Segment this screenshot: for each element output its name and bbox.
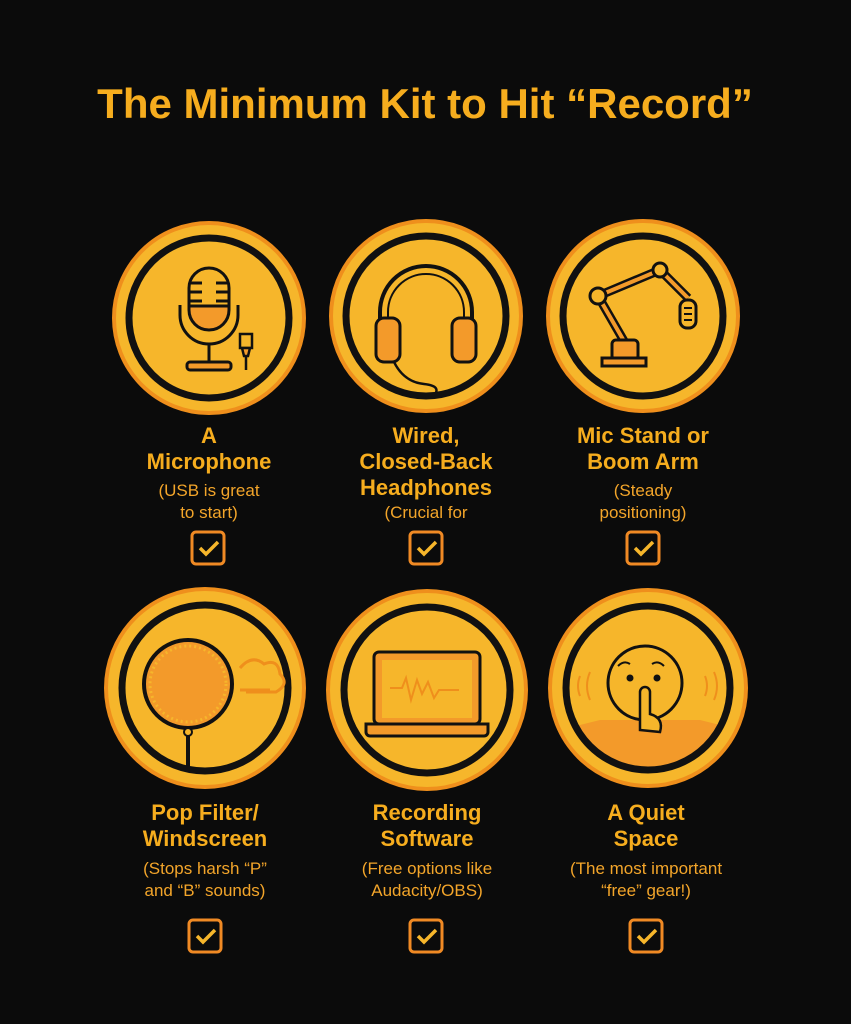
icon circle: laptop: [328, 591, 526, 789]
heading: software: Recording: [373, 800, 481, 825]
text: microphone note: to start): [180, 503, 238, 522]
heading: headphones: Wired,: [392, 423, 460, 448]
icon circle: boom arm: [548, 221, 738, 411]
panel: microphone: [114, 223, 304, 564]
text: quiet space note: “free” gear!): [601, 881, 691, 900]
panel: headphones: [331, 221, 521, 564]
checkbox: [630, 920, 662, 952]
text: software note: Audacity/OBS): [371, 881, 483, 900]
heading: microphone: A: [201, 423, 217, 448]
checkbox: [410, 532, 442, 564]
checkbox: [192, 532, 224, 564]
heading: headphones: Headphones: [360, 475, 492, 500]
text: pop filter note: (Stops harsh “P”: [143, 859, 267, 878]
icon circle: microphone: [114, 223, 304, 413]
panel: pop filter: [106, 589, 304, 952]
icon circle: shush face: [550, 590, 746, 790]
heading: pop filter: Windscreen: [143, 826, 267, 851]
panel: quiet space: [550, 590, 746, 952]
heading: pop filter: Pop Filter/: [151, 800, 259, 825]
heading: headphones: Closed-Back: [359, 449, 493, 474]
heading: quiet space: Space: [614, 826, 678, 851]
text: microphone note: (USB is great: [158, 481, 260, 500]
text: software note: (Free options like: [362, 859, 492, 878]
text: pop filter note: and “B” sounds): [145, 881, 265, 900]
checkbox: [410, 920, 442, 952]
text: boom arm note: positioning): [600, 503, 686, 522]
heading: software: Software: [381, 826, 473, 851]
text: boom arm note: (Steady: [614, 481, 673, 500]
icon circle: headphones: [331, 221, 521, 411]
title: The Minimum Kit to Hit “Record”: [97, 80, 753, 127]
text: headphones note: (Crucial for: [384, 503, 468, 522]
heading: boom arm: Mic Stand or: [577, 423, 709, 448]
heading: quiet space: A Quiet: [607, 800, 685, 825]
icon circle: pop filter: [106, 589, 304, 787]
checkbox: [627, 532, 659, 564]
heading: microphone: Microphone: [147, 449, 271, 474]
checkbox: [189, 920, 221, 952]
text: quiet space note: (The most important: [570, 859, 722, 878]
panel: boom arm: [548, 221, 738, 564]
panel: software: [328, 591, 526, 952]
heading: boom arm: Boom Arm: [587, 449, 699, 474]
